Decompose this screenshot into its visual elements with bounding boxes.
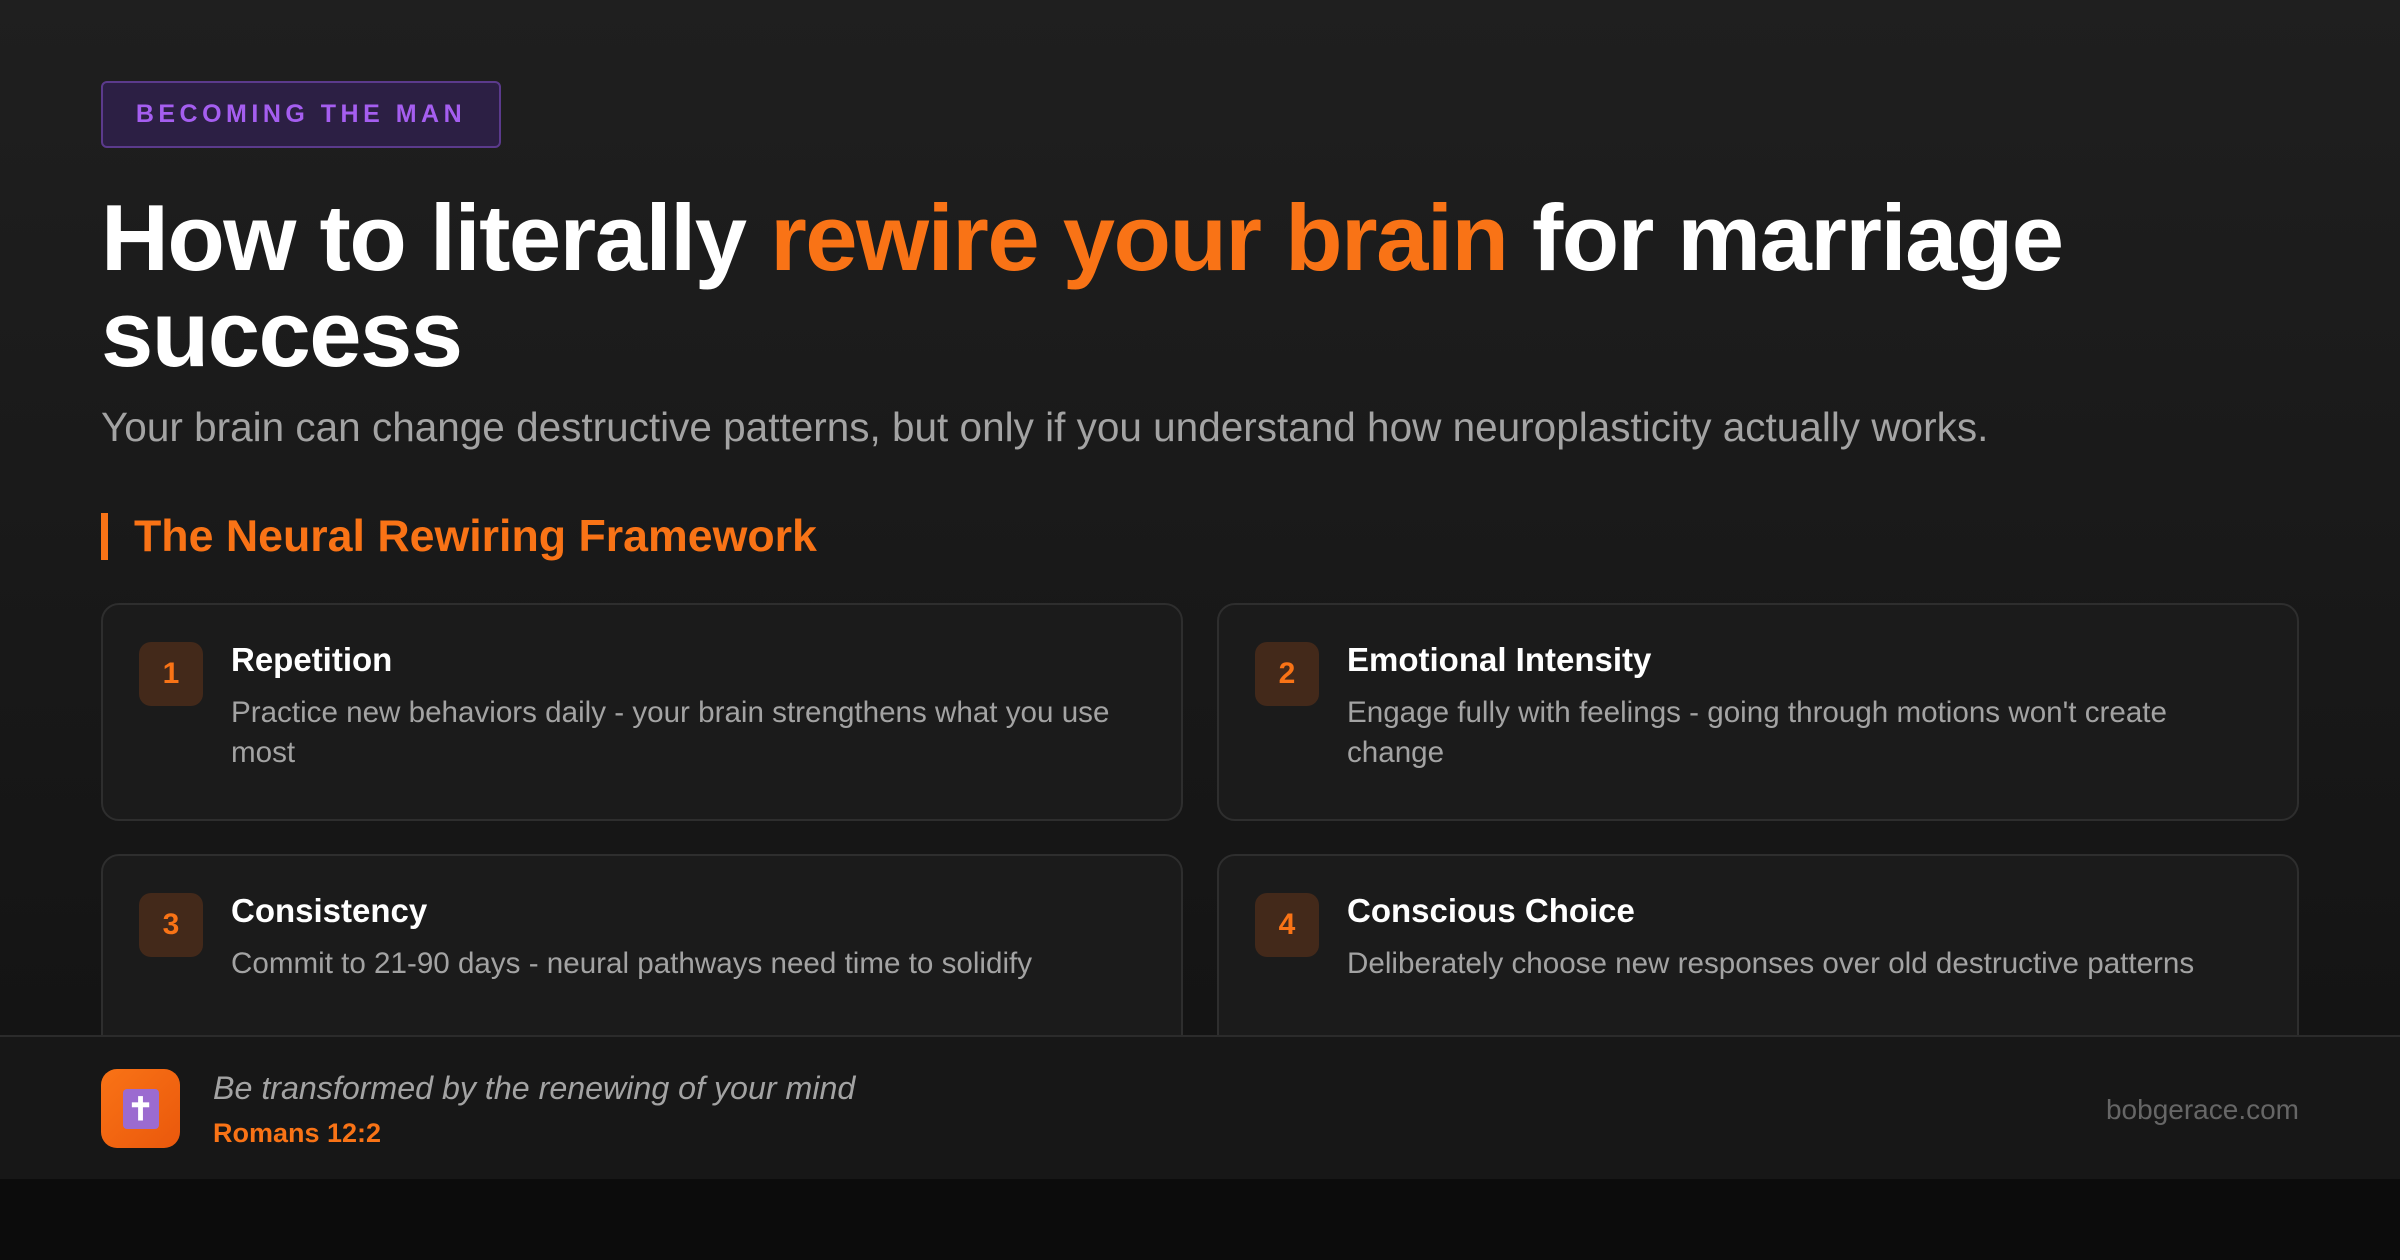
card 1: Repetition bbox=[231, 641, 392, 678]
title: How to literally rewire your brain for marriage success bbox=[101, 185, 2063, 386]
card 2: 2 bbox=[1279, 657, 1295, 690]
card 3: Consistency bbox=[231, 892, 427, 929]
card 2: Emotional Intensity bbox=[1347, 641, 1651, 678]
badge bbox=[101, 81, 501, 148]
card 4 bbox=[1217, 854, 2299, 1054]
card 2: Engage fully with feelings - going through motions won't create change bbox=[1347, 696, 2167, 769]
card 1: Practice new behaviors daily - your brain strengthens what you use most bbox=[231, 696, 1109, 769]
reference: Romans 12:2 bbox=[213, 1118, 381, 1148]
quote: Be transformed by the renewing of your mind bbox=[213, 1070, 855, 1106]
badge: BECOMING THE MAN bbox=[136, 100, 466, 128]
card 4: Conscious Choice bbox=[1347, 892, 1635, 929]
card 1: 1 bbox=[163, 657, 179, 690]
website: bobgerace.com bbox=[2106, 1094, 2299, 1125]
subtitle: Your brain can change destructive patterns, but only if you understand how neuroplasticity actually works. bbox=[101, 404, 1988, 450]
section heading: The Neural Rewiring Framework bbox=[134, 512, 817, 561]
card 3: 3 bbox=[163, 908, 179, 941]
footer bbox=[0, 1035, 2400, 1179]
card 3: Commit to 21-90 days - neural pathways need time to solidify bbox=[231, 947, 1032, 980]
card 3 bbox=[101, 854, 1183, 1054]
card 4: 4 bbox=[1279, 908, 1295, 941]
icon: cross: ✝ bbox=[127, 1090, 154, 1126]
card 2 bbox=[1217, 603, 2299, 821]
card 4: Deliberately choose new responses over old destructive patterns bbox=[1347, 947, 2194, 980]
card 1 bbox=[101, 603, 1183, 821]
icon: cross bbox=[101, 1069, 180, 1148]
